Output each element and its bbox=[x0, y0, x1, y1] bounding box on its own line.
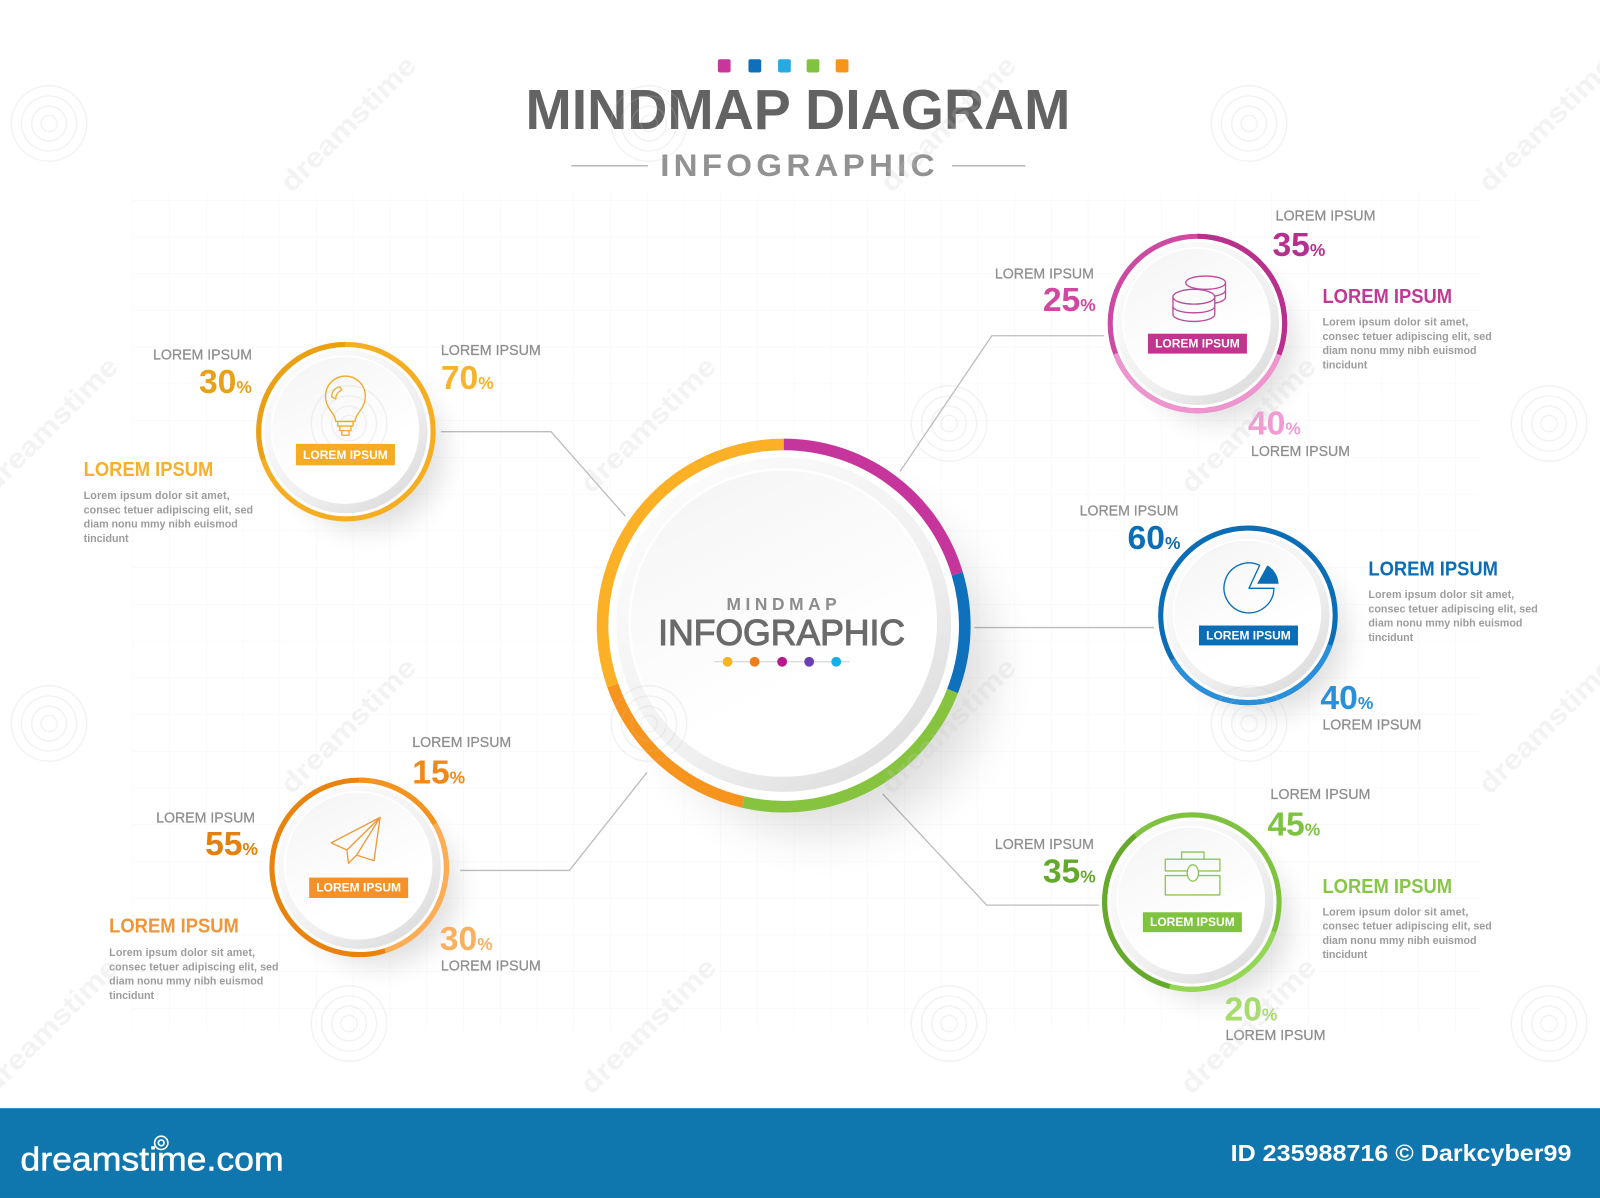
icon: briefcase bbox=[1165, 852, 1220, 895]
text block: consec tetuer adipiscing elit, sed bbox=[1322, 331, 1492, 343]
panel: pink coins node bbox=[995, 208, 1492, 460]
central label: mindmap: MINDMAP bbox=[727, 594, 837, 614]
watermark text: dreamstime bbox=[1472, 49, 1600, 198]
stat: 30%: 30% bbox=[199, 364, 252, 401]
text block: diam nonu mmy nibh euismod bbox=[1322, 345, 1477, 357]
watermark text: dreamstime bbox=[874, 49, 1022, 198]
stat: 40%: LOREM IPSUM bbox=[1322, 718, 1421, 734]
text block: tincidunt bbox=[1368, 632, 1414, 644]
text block: tincidunt bbox=[109, 990, 155, 1002]
stat: 70%: LOREM IPSUM bbox=[441, 343, 541, 359]
tag: LOREM IPSUM bbox=[1206, 628, 1291, 642]
stat: 20% bbox=[1224, 991, 1326, 1044]
connector lines bbox=[441, 336, 1154, 905]
stat: 20%: LOREM IPSUM bbox=[1226, 1028, 1326, 1044]
text block: consec tetuer adipiscing elit, sed bbox=[1322, 921, 1492, 933]
subtitle: infographic: INFOGRAPHIC bbox=[660, 147, 939, 183]
icon: light bulb bbox=[326, 376, 365, 435]
stat: 40%: 40% bbox=[1248, 406, 1301, 443]
text block: tincidunt bbox=[1322, 359, 1368, 371]
text block bbox=[1322, 286, 1492, 371]
text block bbox=[109, 916, 279, 1002]
icon: paper plane bbox=[331, 817, 380, 863]
brand wordmark: dreamstime.com bbox=[20, 1141, 284, 1178]
central ring segments bbox=[603, 444, 965, 807]
stat: 45%: 45% bbox=[1267, 807, 1320, 844]
text block: LOREM IPSUM bbox=[1368, 559, 1498, 581]
text block: Lorem ipsum dolor sit amet, bbox=[1322, 906, 1468, 918]
stat: 35%: 35% bbox=[1043, 854, 1096, 891]
text block: diam nonu mmy nibh euismod bbox=[109, 976, 263, 988]
stat: 35% bbox=[995, 837, 1096, 891]
stat: 35%: LOREM IPSUM bbox=[1276, 208, 1376, 224]
stat: 40%: 40% bbox=[1320, 680, 1373, 717]
stat: 30%: LOREM IPSUM bbox=[441, 958, 541, 974]
text block: diam nonu mmy nibh euismod bbox=[1368, 618, 1522, 630]
stat: 70% bbox=[441, 343, 541, 397]
text block: consec tetuer adipiscing elit, sed bbox=[1368, 603, 1538, 615]
watermark text: dreamstime bbox=[1174, 952, 1322, 1100]
ring bbox=[1110, 236, 1285, 411]
stat: 35%: LOREM IPSUM bbox=[995, 837, 1094, 853]
stat: 20%: 20% bbox=[1224, 991, 1277, 1028]
watermark text: dreamstime bbox=[1174, 350, 1322, 499]
text block: LOREM IPSUM bbox=[84, 459, 213, 481]
tag: LOREM IPSUM bbox=[1150, 915, 1235, 929]
stat: 35% bbox=[1272, 208, 1376, 264]
tag bbox=[1199, 626, 1298, 645]
text block: consec tetuer adipiscing elit, sed bbox=[84, 504, 253, 516]
watermark text: dreamstime bbox=[274, 652, 422, 800]
tag bbox=[296, 444, 395, 465]
panel: orange paper plane node bbox=[109, 735, 541, 1002]
text block: Lorem ipsum dolor sit amet, bbox=[1368, 589, 1514, 601]
panel: yellow lightbulb node bbox=[84, 343, 541, 545]
icon: coins bbox=[1173, 276, 1226, 321]
stat: 60%: LOREM IPSUM bbox=[1080, 503, 1179, 519]
stat: 70%: 70% bbox=[441, 360, 494, 397]
tag: LOREM IPSUM bbox=[303, 448, 388, 462]
panel: green briefcase node bbox=[995, 787, 1492, 1044]
stat: 60%: 60% bbox=[1128, 520, 1180, 557]
text block: tincidunt bbox=[1322, 949, 1368, 961]
watermark text: dreamstime bbox=[274, 49, 422, 198]
watermark text: dreamstime bbox=[574, 952, 722, 1100]
stat: 55% bbox=[156, 810, 258, 863]
tag: LOREM IPSUM bbox=[316, 880, 401, 894]
color squares bbox=[718, 59, 848, 72]
stat: 25%: 25% bbox=[1043, 282, 1096, 319]
text block: LOREM IPSUM bbox=[1322, 286, 1452, 308]
stat: 60% bbox=[1080, 503, 1180, 557]
ring bbox=[272, 780, 446, 955]
stat: 35%: 35% bbox=[1272, 227, 1325, 264]
watermark text: dreamstime bbox=[874, 652, 1022, 800]
text block: LOREM IPSUM bbox=[109, 916, 239, 938]
icon: pie chart bbox=[1224, 563, 1279, 613]
text block: Lorem ipsum dolor sit amet, bbox=[109, 947, 255, 959]
stat: 45%: LOREM IPSUM bbox=[1270, 787, 1370, 803]
ring bbox=[259, 344, 433, 519]
stat: 55%: LOREM IPSUM bbox=[156, 810, 255, 826]
footer banner bbox=[0, 1108, 1600, 1198]
image credit: ID 235988716 © Darkcyber99 bbox=[1231, 1140, 1571, 1166]
panel: blue pie chart node bbox=[1080, 503, 1538, 734]
stat: 40% bbox=[1320, 680, 1421, 734]
text block: Lorem ipsum dolor sit amet, bbox=[84, 490, 230, 502]
tag bbox=[1148, 334, 1247, 354]
five colored dots bbox=[714, 657, 850, 667]
watermark text: dreamstime bbox=[574, 350, 722, 499]
text block: tincidunt bbox=[84, 533, 129, 545]
stat: 30%: LOREM IPSUM bbox=[153, 348, 252, 364]
text block: diam nonu mmy nibh euismod bbox=[84, 519, 238, 531]
stat: 30%: 30% bbox=[440, 921, 493, 958]
stat: 45% bbox=[1267, 787, 1370, 844]
tag bbox=[309, 878, 408, 898]
stat: 15%: LOREM IPSUM bbox=[412, 735, 511, 751]
stat: 40%: LOREM IPSUM bbox=[1251, 444, 1350, 460]
stat: 30% bbox=[153, 348, 252, 401]
title block bbox=[526, 59, 1070, 183]
text block: diam nonu mmy nibh euismod bbox=[1322, 935, 1477, 947]
stat: 15% bbox=[412, 735, 511, 792]
ring bbox=[1105, 815, 1279, 989]
central label: infographic: INFOGRAPHIC bbox=[658, 613, 905, 653]
central circle bbox=[600, 442, 990, 832]
heading: mindmap diagram: MINDMAP DIAGRAM bbox=[526, 78, 1070, 141]
watermark text: dreamstime bbox=[1472, 652, 1600, 800]
text block: Lorem ipsum dolor sit amet, bbox=[1322, 317, 1468, 329]
tag bbox=[1143, 912, 1242, 932]
stat: 15%: 15% bbox=[412, 755, 465, 792]
text block bbox=[1368, 559, 1538, 644]
tag: LOREM IPSUM bbox=[1155, 336, 1240, 350]
text block: consec tetuer adipiscing elit, sed bbox=[109, 961, 279, 973]
text block: LOREM IPSUM bbox=[1322, 876, 1452, 898]
stat: 40% bbox=[1248, 406, 1350, 460]
stat: 25% bbox=[995, 267, 1096, 319]
ring bbox=[1161, 528, 1335, 703]
text block bbox=[84, 459, 253, 545]
stat: 55%: 55% bbox=[205, 826, 258, 863]
stat: 30% bbox=[440, 921, 541, 974]
stat: 25%: LOREM IPSUM bbox=[995, 267, 1094, 283]
text block bbox=[1322, 876, 1492, 961]
icon: brand spiral bbox=[155, 1136, 168, 1150]
